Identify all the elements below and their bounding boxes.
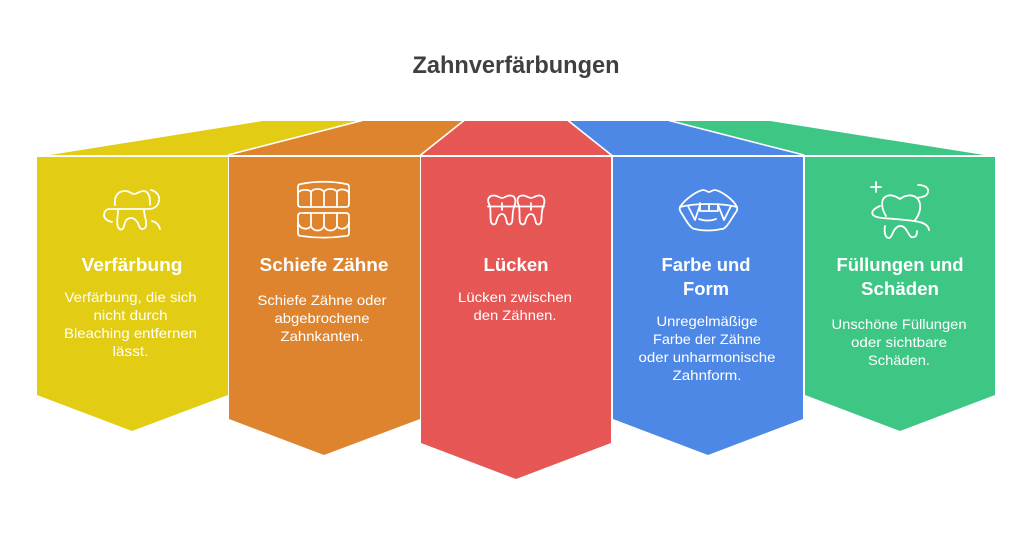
body: green [805,157,995,431]
description [258,292,387,344]
roof seam: yellow and orange [228,120,362,155]
title: Zahnverfärbungen [412,52,620,79]
description: Lücken zwischen [458,289,572,305]
description [64,289,197,359]
description: Unschöne Füllungen [832,316,966,332]
description: Schäden. [868,352,930,368]
heading [662,255,750,299]
description [458,289,572,323]
description: Zahnform. [672,367,742,383]
description: oder unharmonische [638,349,776,365]
panel: Verfärbung [37,121,360,431]
description: Zahnkanten. [280,328,364,344]
description [638,313,776,383]
description: Unregelmäßige [656,313,758,329]
description: den Zähnen. [474,307,556,323]
heading: Schäden [861,279,939,299]
body: blue [613,157,803,455]
description [832,316,966,368]
panel: Lücken [420,120,612,479]
icon: tooth with floss [104,190,160,230]
icon: mouth with fangs [680,190,737,230]
description: abgebrochene [274,310,370,326]
description: nicht durch [94,307,168,323]
description: Schiefe Zähne oder [258,292,387,308]
description: lässt. [112,343,148,359]
roof: orange [229,121,466,155]
heading: Füllungen und [836,255,964,275]
icon: dentures [298,182,349,238]
description: Bleaching entfernen [64,325,197,341]
body: orange [229,157,420,455]
dotted texture [421,121,611,479]
description: Farbe der Zähne [653,331,761,347]
heading: Schiefe Zähne [260,255,388,275]
heading: Form [683,279,729,299]
icon: tooth with floss and plus [871,182,929,238]
roof seam: blue and green [669,120,804,155]
panel: Füllungen und Schäden [672,121,995,431]
heading [836,255,964,299]
description: oder sichtbare [851,334,947,350]
panel: Schiefe Zähne [228,120,466,455]
heading: Verfärbung [82,255,182,275]
description: Verfärbung, die sich [64,289,196,305]
body: red [421,157,611,479]
roof: red [421,121,611,155]
roof seams: red roof outline [420,120,612,156]
panel: Farbe und Form [570,120,804,455]
icon: teeth with braces [488,196,544,224]
roof: green [672,121,984,155]
roof: yellow [50,121,360,155]
heading: Farbe und [662,255,750,275]
body: yellow [37,157,228,431]
roof: blue [570,121,803,155]
heading: Lücken [484,255,548,275]
